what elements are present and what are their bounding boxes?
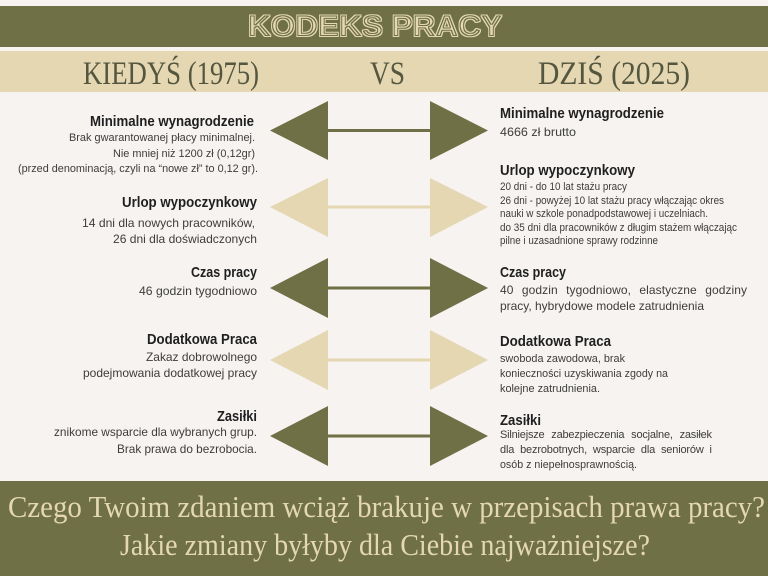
text block: minimum wage now: 4666 zł brutto [500, 125, 576, 139]
text block: benefits now: osób z niepełnosprawnością. [500, 459, 637, 471]
text block: additional work now: Dodatkowa Praca [500, 333, 612, 350]
heading: then: KIEDYŚ (1975) [83, 54, 259, 92]
text block: minimum wage then [18, 113, 258, 175]
text block: additional work then: Dodatkowa Praca [147, 331, 258, 348]
text block: additional work then [83, 331, 258, 380]
text block: additional work now: swoboda zawodowa, brak [500, 353, 625, 365]
heading: now: DZIŚ (2025) [538, 54, 690, 92]
arrow: benefits [270, 406, 488, 466]
text block: working time now: Czas pracy [500, 264, 567, 281]
heading: versus: VS [370, 56, 405, 92]
text block: benefits then [54, 408, 257, 456]
arrow: additional work [270, 330, 488, 390]
text block: annual leave then: 26 dni dla doświadczonych [113, 232, 257, 246]
text block: benefits then: Zasiłki [217, 408, 257, 425]
text block: additional work now: kolejne zatrudnienia. [500, 383, 600, 395]
arrow: minimum wage [270, 101, 488, 160]
text block: working time then [139, 264, 258, 298]
text block: minimum wage then: Nie mniej niż 1200 zł (0,12gr) [113, 148, 255, 160]
text block: additional work then: Zakaz dobrowolnego [146, 350, 257, 364]
comparison header band [0, 51, 768, 92]
text block: benefits then: znikome wsparcie dla wybranych grup. [54, 425, 257, 439]
text block: working time now: pracy, hybrydowe modele zatrudnienia [500, 299, 704, 313]
text block: minimum wage then: (przed denominacją, czyli na “nowe zł” to 0,12 gr). [18, 163, 258, 175]
text block: working time then: Czas pracy [191, 264, 258, 281]
text block: annual leave then: 14 dni dla nowych pracowników, [82, 216, 255, 230]
panel: then column [18, 113, 258, 456]
text block: working time now: 40 godzin tygodniowo, elastyczne godziny [500, 283, 747, 297]
text block: annual leave now: pilne i uzasadnione sprawy rodzinne [500, 235, 658, 247]
text block: benefits then: Brak prawa do bezrobocia. [117, 442, 257, 456]
text block: benefits now: Zasiłki [500, 412, 541, 429]
question line 2: Jakie zmiany byłyby dla Ciebie najważniejsze? [120, 527, 650, 562]
footer question band [0, 481, 768, 576]
text block: annual leave then: Urlop wypoczynkowy [122, 194, 258, 211]
text block: working time then: 46 godzin tygodniowo [139, 284, 257, 298]
title banner [0, 6, 768, 47]
text block: working time now [500, 264, 747, 313]
text block: annual leave now: 26 dni - powyżej 10 lat stażu pracy włączając okres [500, 195, 724, 207]
text block: annual leave now: do 35 dni dla pracowników z długim stażem włączając [500, 222, 737, 234]
text block: minimum wage now [500, 105, 664, 139]
text block: additional work now: konieczności uzyskiwania zgody na [500, 368, 669, 380]
text block: annual leave now: 20 dni - do 10 lat stażu pracy [500, 181, 627, 193]
arrow: annual leave [270, 178, 488, 237]
text block: additional work now [500, 333, 669, 395]
text block: benefits now: Silniejsze zabezpieczenia socjalne, zasiłek [500, 429, 712, 441]
text block: minimum wage then: Brak gwarantowanej płacy minimalnej. [69, 132, 255, 144]
text block: minimum wage then: Minimalne wynagrodzenie [90, 113, 254, 130]
text block: additional work then: podejmowania dodatkowej pracy [83, 366, 257, 380]
arrow: working time [270, 258, 488, 318]
text block: minimum wage now: Minimalne wynagrodzenie [500, 105, 664, 122]
text block: annual leave now [500, 162, 737, 247]
panel: now column [500, 105, 747, 471]
text block: benefits now: dla bezrobotnych, wsparcie dla seniorów i [500, 444, 712, 456]
text block: benefits now [500, 412, 712, 471]
text block: annual leave then [82, 194, 258, 246]
text block: annual leave now: nauki w szkole ponadpodstawowej i uczelniach. [500, 208, 708, 220]
title: KODEKS PRACY [248, 10, 502, 43]
text block: annual leave now: Urlop wypoczynkowy [500, 162, 636, 179]
